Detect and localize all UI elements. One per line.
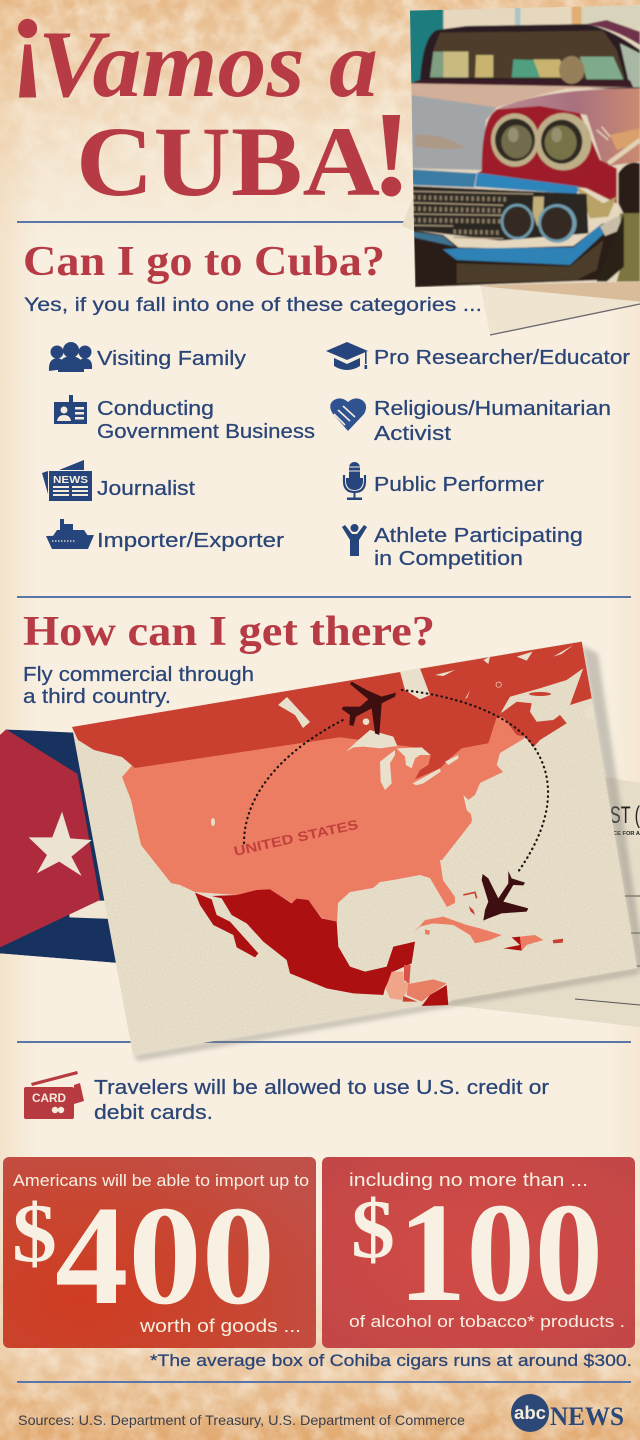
icon: ship (46, 519, 94, 549)
rule: footer (17, 1381, 631, 1383)
paper sheet behind photo (402, 197, 640, 335)
label: public performer: Public Performer (374, 474, 544, 496)
map postcard (72, 641, 637, 1055)
label: pro researcher: Pro Researcher/Educator (374, 347, 630, 369)
star (29, 812, 92, 876)
text: fly commercial: Fly commercial through (23, 664, 254, 686)
intro text: Yes, if you fall into one of these categories ... (24, 295, 482, 316)
map: Anticosti (529, 692, 551, 696)
label: visiting family: Visiting Family (97, 348, 246, 370)
map label: united states: UNITED STATES (232, 817, 360, 859)
panel: $400: Americans will be able to import up to (13, 1171, 309, 1190)
text: fly commercial: a third country. (23, 686, 171, 708)
panel: $100 (322, 1157, 635, 1348)
Caribbean islands (413, 892, 563, 951)
text: credit cards: Travelers will be allowed to use U.S. credit or (94, 1077, 549, 1099)
category list (42, 342, 630, 570)
card: postcard back (449, 777, 640, 1027)
panel: $100: $ (351, 1183, 395, 1276)
map: USA (122, 710, 525, 922)
label: religious humanitarian: Religious/Humanitarian (374, 398, 611, 420)
label: importer exporter: Importer/Exporter (97, 530, 284, 552)
icon: credit cards (24, 1071, 84, 1119)
card shadow (133, 645, 640, 1061)
Central America (386, 965, 448, 1006)
label: government business: Government Business (97, 421, 315, 443)
card: Cuban flag (0, 729, 122, 963)
title: ¡Vamos a CUBA! (8, 0, 412, 222)
car photograph on paper (402, 3, 640, 335)
label: athlete: Athlete Participating (374, 525, 583, 547)
icon: family (49, 342, 92, 372)
text: credit cards: debit cards. (94, 1102, 213, 1124)
panel: $100: of alcohol or tobacco* products . (349, 1312, 625, 1331)
panel: $400: 400 (55, 1176, 275, 1334)
title: ¡Vamos a CUBA!: Vamos a (38, 11, 378, 117)
card surface (72, 641, 637, 1055)
panel: $100: including no more than ... (349, 1170, 588, 1190)
logo: abc news: abc (514, 1403, 546, 1423)
logo: abc news: NEWS (550, 1402, 624, 1431)
map: Mexico, Central America and Caribbean (195, 871, 563, 1006)
logo: abc news (511, 1394, 624, 1432)
flight path (244, 690, 548, 872)
icon: graduation cap (326, 342, 368, 370)
label: religious humanitarian (374, 398, 611, 445)
photo of a vintage red and blue car (407, 3, 640, 290)
map: lakes, bays and islands (211, 645, 594, 826)
label: religious humanitarian: Activist (374, 423, 452, 445)
title: ¡Vamos a CUBA!: CUBA (76, 106, 380, 217)
text: fly commercial (23, 664, 254, 708)
sources: Sources: U.S. Department of Treasury, U.S. Department of Commerce (18, 1412, 465, 1428)
rule: section 2 (17, 596, 631, 598)
label: journalist: Journalist (97, 478, 195, 500)
icon: id badge (54, 395, 87, 424)
panel: $400: $ (12, 1187, 57, 1280)
footnote: *The average box of Cohiba cigars runs at around $300. (150, 1351, 632, 1370)
text: credit cards (94, 1077, 549, 1124)
label: government business (97, 398, 315, 443)
rule: below title (17, 221, 407, 223)
plane: south (482, 871, 528, 921)
panel: $400: worth of goods ... (139, 1316, 301, 1336)
label: athlete (374, 525, 583, 570)
rule: section 3 (17, 1041, 631, 1043)
heading: how can I get there: How can I get there? (23, 609, 435, 655)
icon: credit cards: CARD (32, 1093, 66, 1105)
label: government business: Conducting (97, 398, 214, 420)
heading: Can I go to Cuba?: Can I go to Cuba? (23, 239, 385, 285)
Mexico (195, 889, 415, 995)
plane: north (342, 682, 396, 735)
icon: newspaper: NEWS (53, 475, 88, 486)
icon: heart handshake (330, 398, 366, 431)
icon: athlete (342, 524, 367, 556)
title: ¡Vamos a CUBA!: ! (371, 87, 412, 222)
label: athlete: in Competition (374, 548, 523, 570)
icon: microphone (344, 462, 365, 500)
map: Canada (72, 642, 592, 779)
panel: $100: 100 (398, 1173, 603, 1331)
panel: $400 (3, 1157, 316, 1348)
icon: newspaper (42, 460, 92, 501)
card: postcard back: CE FOR A (613, 831, 640, 837)
